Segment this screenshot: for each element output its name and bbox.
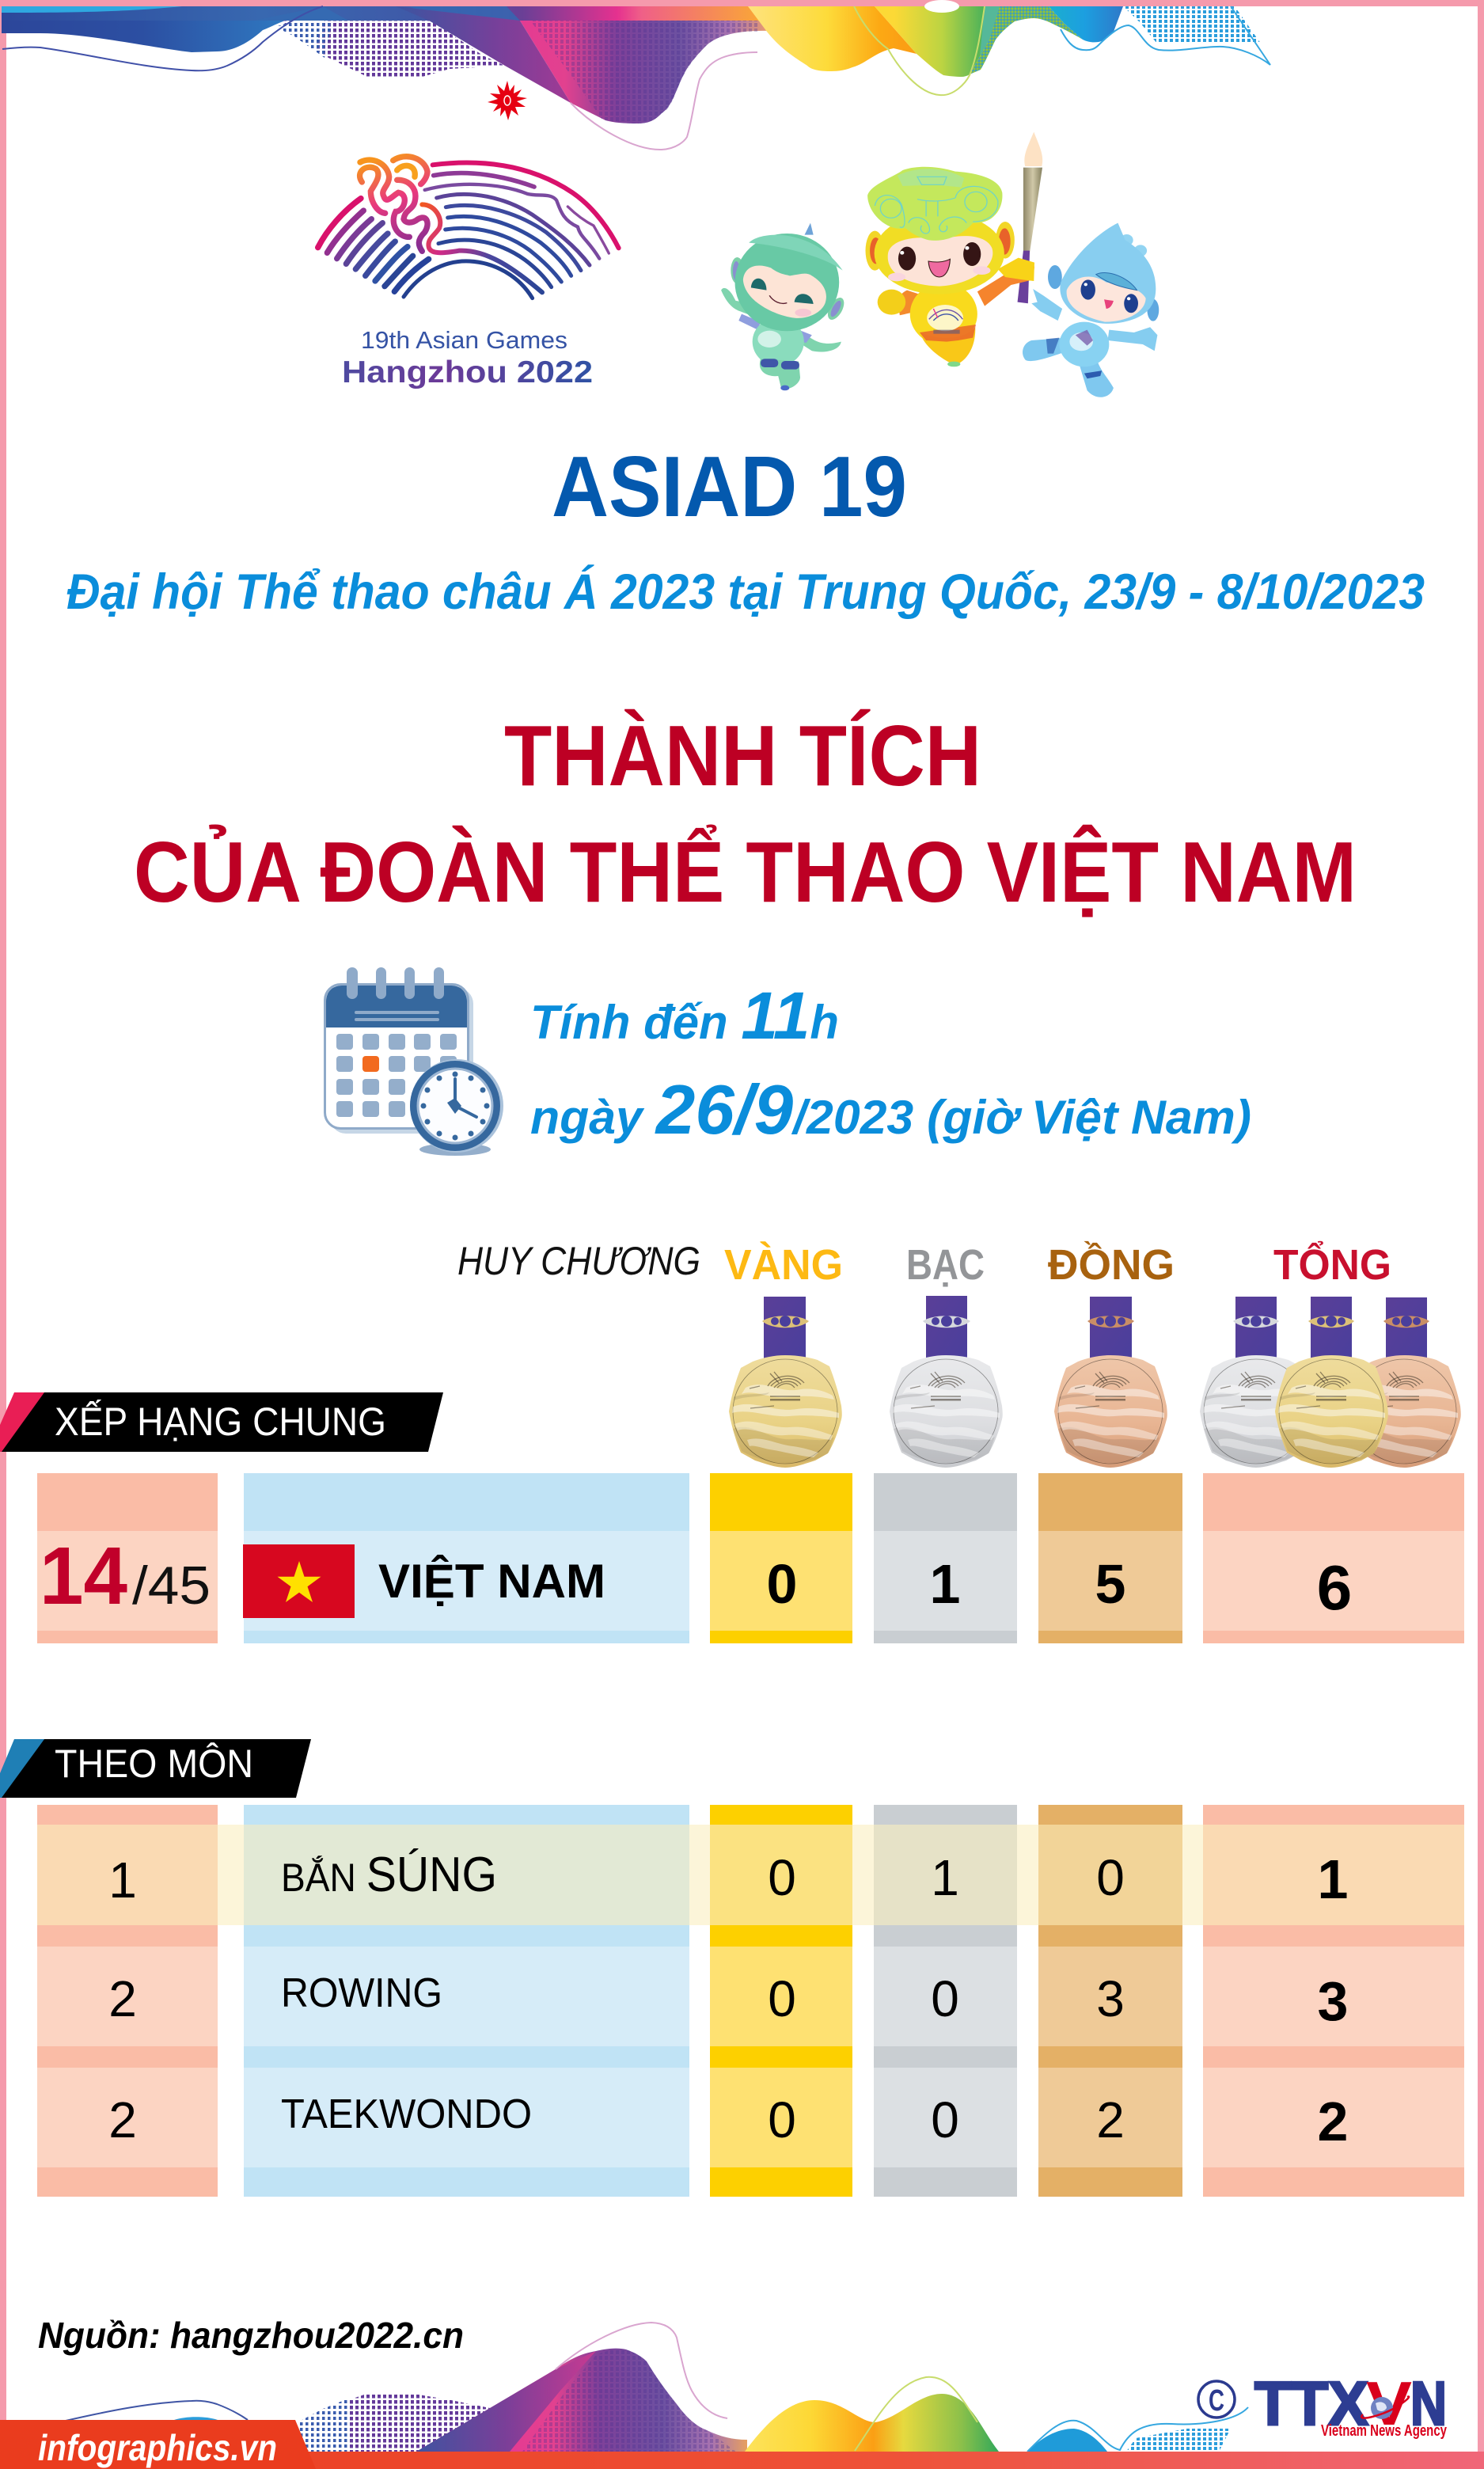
TTXVN logo bbox=[1198, 2368, 1448, 2440]
section badge: xếp hạng chung: XẾP HẠNG CHUNG bbox=[55, 1400, 386, 1444]
header: tổng: TỔNG bbox=[1273, 1241, 1391, 1289]
medal group: total bbox=[1200, 1297, 1461, 1468]
date line 2: ngày 26/9/2023 (giờ Việt Nam) bbox=[530, 1070, 1251, 1149]
column: total bbox=[1203, 1473, 1464, 1643]
header: vàng: VÀNG bbox=[724, 1241, 843, 1289]
row: bắn súng bbox=[108, 1848, 1348, 1910]
overall ranking table bbox=[37, 1473, 1464, 1643]
column: gold bbox=[710, 1473, 852, 1643]
header: bạc: BẠC bbox=[906, 1241, 985, 1289]
row: bắn súng: BẮN SÚNG bbox=[281, 1848, 497, 1902]
column: rank: /45 bbox=[132, 1555, 211, 1616]
top decorative wave banner bbox=[2, 0, 1270, 150]
row: rowing bbox=[108, 1970, 1348, 2032]
column: silver bbox=[874, 1473, 1017, 1643]
row: rowing: ROWING bbox=[281, 1970, 442, 2016]
row: bắn súng: 0 bbox=[1096, 1849, 1125, 1906]
header: huy chương: HUY CHƯƠNG bbox=[457, 1239, 700, 1283]
logo: 19th Asian Games Hangzhou 2022 bbox=[318, 157, 619, 389]
section badge: theo môn bbox=[0, 1739, 311, 1798]
logo mark: arches and flame bbox=[318, 157, 619, 298]
agency letter N: N bbox=[1410, 2368, 1447, 2438]
mascots bbox=[721, 132, 1159, 397]
mascot: green bbox=[721, 223, 848, 390]
heading line 2: CỦA ĐOÀN THỂ THAO VIỆT NAM bbox=[134, 824, 1357, 921]
copyright mark bbox=[1198, 2381, 1235, 2418]
bottom decorative waves bbox=[66, 2323, 1248, 2452]
row: taekwondo: 0 bbox=[931, 2091, 959, 2148]
medal: gold bbox=[729, 1297, 842, 1468]
header: đồng: ĐỒNG bbox=[1048, 1241, 1175, 1289]
column: gold: 0 bbox=[767, 1553, 797, 1615]
title: ASIAD 19: ASIAD 19 bbox=[552, 439, 907, 535]
heading line 1: THÀNH TÍCH bbox=[504, 708, 981, 804]
icon: globe and swoosh bbox=[1361, 2397, 1409, 2419]
row: bắn súng: 1 bbox=[108, 1852, 137, 1909]
column: bronze bbox=[1038, 1473, 1182, 1643]
copyright mark: C bbox=[1209, 2384, 1224, 2418]
subtitle: Đại hội Thể thao châu Á 2023 tại Trung Quốc, 23/9 - 8/10/2023 bbox=[66, 564, 1425, 620]
row: rowing: 3 bbox=[1318, 1970, 1348, 2032]
medal column headers bbox=[457, 1239, 1391, 1289]
row: rowing: 2 bbox=[108, 1970, 137, 2027]
mascot: yellow with torch bbox=[866, 132, 1042, 367]
column: total: 6 bbox=[1317, 1552, 1352, 1623]
date line 1: Tính đến 11h bbox=[530, 978, 839, 1053]
torch bbox=[1018, 132, 1042, 303]
row highlight bbox=[37, 1825, 1464, 1925]
table column backgrounds bbox=[37, 1805, 1464, 2197]
agency letters TTX: TTX bbox=[1254, 2368, 1368, 2438]
column: rank bbox=[37, 1473, 218, 1643]
row: taekwondo: TAEKWONDO bbox=[281, 2091, 532, 2137]
column: bronze: 5 bbox=[1095, 1553, 1125, 1615]
icon: red sun emblem bbox=[488, 81, 527, 120]
section badge: xếp hạng chung bbox=[0, 1392, 443, 1452]
source: Nguồn: hangzhou2022.cn bbox=[38, 2315, 464, 2356]
icon: Vietnam flag bbox=[243, 1544, 355, 1618]
row: taekwondo: 2 bbox=[1096, 2091, 1125, 2148]
medals row bbox=[729, 1296, 1461, 1468]
icon: calendar and clock bbox=[325, 967, 503, 1156]
agency letter V: V bbox=[1366, 2368, 1412, 2438]
row: bắn súng: 1 bbox=[931, 1849, 959, 1906]
by-sport table bbox=[37, 1805, 1464, 2197]
row: bắn súng: 0 bbox=[768, 1849, 796, 1906]
row: taekwondo: 2 bbox=[108, 2091, 137, 2148]
logo text line 1: 19th Asian Games bbox=[361, 326, 567, 354]
logo text line 2: Hangzhou 2022 bbox=[342, 355, 593, 389]
section badge: theo môn: THEO MÔN bbox=[55, 1742, 253, 1786]
medal: bronze bbox=[1054, 1297, 1167, 1468]
row: bắn súng: 1 bbox=[1318, 1848, 1348, 1910]
column: country: VIỆT NAM bbox=[378, 1555, 605, 1608]
column: rank: 14 bbox=[40, 1530, 127, 1621]
row: taekwondo: 2 bbox=[1318, 2091, 1348, 2152]
medal: silver bbox=[890, 1296, 1003, 1468]
column: silver: 1 bbox=[930, 1553, 960, 1615]
agency tagline: Vietnam News Agency bbox=[1321, 2422, 1448, 2440]
mascot: blue bbox=[1023, 223, 1159, 397]
row: rowing: 3 bbox=[1096, 1970, 1125, 2027]
row: taekwondo: 0 bbox=[768, 2091, 796, 2148]
row: rowing: 0 bbox=[768, 1970, 796, 2027]
column: country bbox=[243, 1473, 689, 1643]
footer banner: infographics.vn: infographics.vn bbox=[38, 2427, 277, 2468]
row: rowing: 0 bbox=[931, 1970, 959, 2027]
bottom bar bbox=[0, 2452, 1484, 2469]
row: taekwondo bbox=[108, 2091, 1348, 2152]
